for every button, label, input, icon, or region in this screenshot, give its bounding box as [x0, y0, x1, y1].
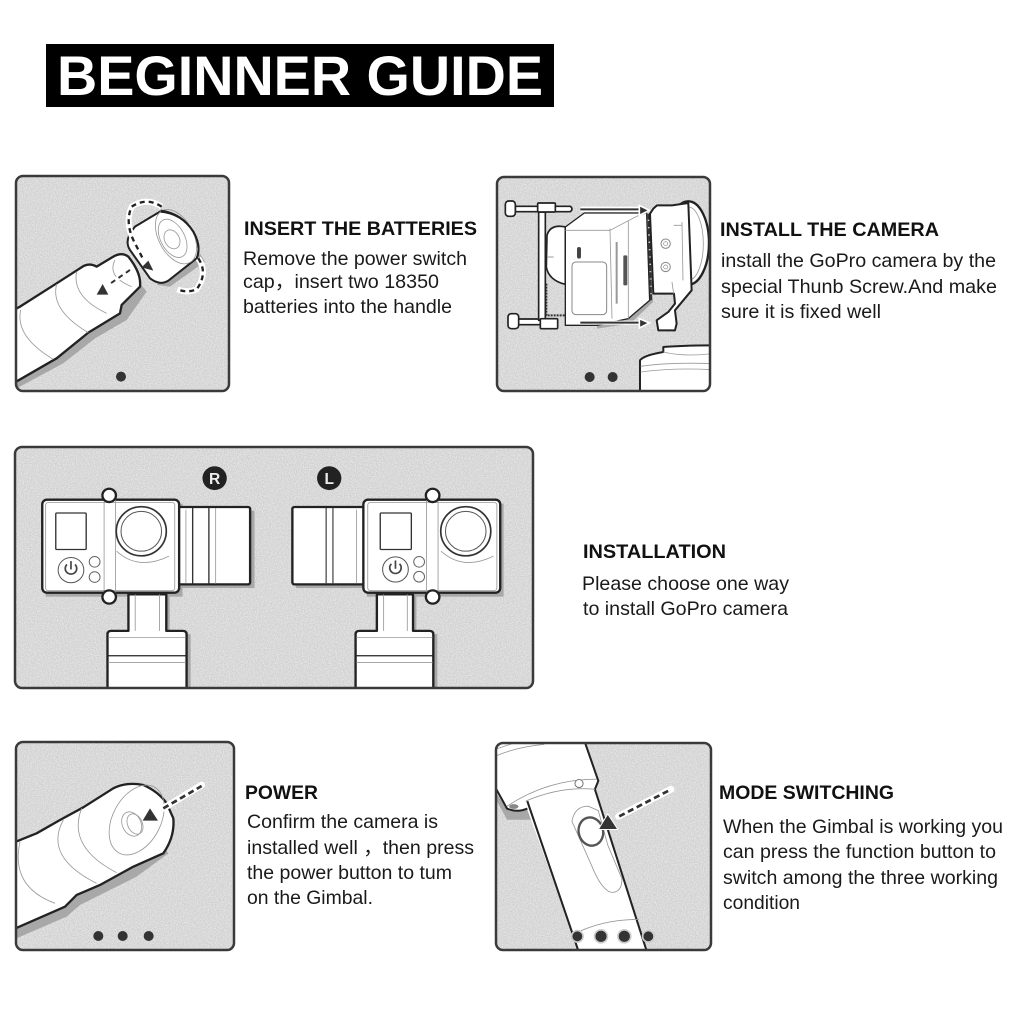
- camera lens: [546, 226, 565, 315]
- panel: mode switching illustration: [494, 740, 711, 953]
- text: installation: INSTALLATION: [583, 542, 726, 563]
- text: power: Confirm the camera is: [247, 812, 438, 833]
- text: mode switching: [719, 783, 1003, 914]
- badge R: R: [209, 471, 220, 488]
- panel: installation illustration: [15, 447, 533, 702]
- panel: power illustration: [13, 742, 234, 950]
- text: power: on the Gimbal.: [247, 888, 373, 909]
- handle base: [640, 345, 714, 394]
- text: insert the batteries: cap，insert two 18350: [243, 272, 439, 293]
- thumb screw bracket: [505, 201, 572, 329]
- text: power: the power button to tum: [247, 863, 452, 884]
- text: installation: Please choose one way: [582, 574, 789, 595]
- text: install the camera: INSTALL THE CAMERA: [720, 220, 939, 241]
- press arrow: [143, 785, 202, 821]
- text: insert the batteries: [243, 219, 477, 318]
- step dots: [93, 931, 154, 941]
- panel: install the camera illustration: [497, 177, 714, 394]
- text: insert the batteries: batteries into the handle: [243, 297, 452, 318]
- text: installation: to install GoPro camera: [583, 599, 788, 620]
- text: install the camera: [720, 220, 997, 323]
- gimbal mount: [649, 201, 709, 330]
- text: mode switching: switch among the three working: [723, 868, 998, 889]
- text: mode switching: MODE SWITCHING: [719, 783, 894, 804]
- badge L: L: [324, 471, 334, 488]
- press arrow: [598, 789, 671, 830]
- step dots: [585, 372, 618, 382]
- step dots: [572, 930, 654, 943]
- handle: [13, 776, 175, 938]
- text: power: installed well ，then press: [247, 838, 474, 859]
- camera body: [565, 213, 653, 329]
- panel: insert the batteries illustration: [13, 176, 229, 391]
- badge R: [202, 466, 227, 490]
- text: install the camera: special Thunb Screw.And make: [721, 277, 997, 298]
- text: insert the batteries: INSERT THE BATTERIES: [244, 219, 477, 240]
- alignment arrows: [580, 205, 649, 328]
- step dot: [116, 372, 126, 382]
- text: install the camera: install the GoPro camera by the: [721, 251, 996, 272]
- handle: [494, 740, 647, 953]
- text: install the camera: sure it is fixed well: [721, 302, 881, 323]
- text: power: [245, 783, 474, 909]
- right-side camera: [42, 489, 255, 702]
- badge L: [317, 466, 341, 490]
- left-side camera: [292, 489, 504, 702]
- text: mode switching: can press the function button to: [723, 842, 996, 863]
- title: BEGINNER GUIDE: [57, 45, 543, 107]
- text: installation: [582, 542, 789, 620]
- handle: [13, 254, 147, 388]
- text: mode switching: condition: [723, 893, 800, 914]
- text: power: POWER: [245, 783, 318, 804]
- battery cap and arrows: [97, 202, 205, 295]
- text: insert the batteries: Remove the power switch: [243, 249, 467, 270]
- text: mode switching: When the Gimbal is working you: [723, 817, 1003, 838]
